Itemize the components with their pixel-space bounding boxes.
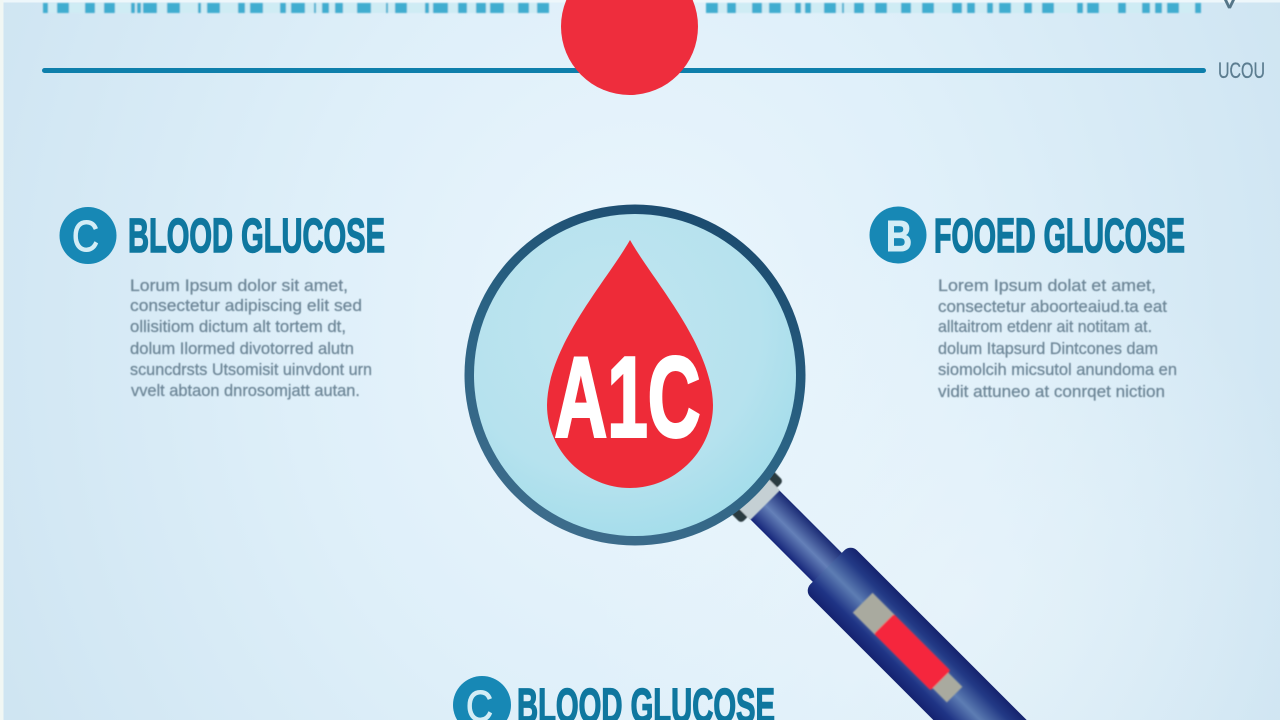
panel: blood glucose left xyxy=(60,207,385,400)
icon: letter B badge: B xyxy=(886,212,912,261)
text block: food glucose: consectetur aboorteaiud.ta eat xyxy=(938,298,1167,316)
handle neck xyxy=(749,489,846,586)
text block: blood glucose: Lorum Ipsum dolor sit amet, xyxy=(130,277,348,295)
icon: magnifying glass lens xyxy=(464,204,806,546)
text block: blood glucose: vvelt abtaon dnrosomjatt autan. xyxy=(131,382,360,400)
icon: blood drop xyxy=(547,240,713,488)
heading: blood glucose: BLOOD GLUCOSE xyxy=(128,210,385,263)
dashed top strip xyxy=(43,3,1201,13)
handle grip xyxy=(804,544,1091,720)
icon: letter B badge xyxy=(870,206,926,264)
text block: food glucose: dolum Itapsurd Dintcones dam xyxy=(938,340,1158,358)
icon: letter C badge xyxy=(453,676,511,720)
text block: food glucose: Lorem Ipsum dolat et amet, xyxy=(938,277,1156,295)
icon: letter C badge: C xyxy=(72,212,99,261)
panel: blood glucose bottom xyxy=(453,676,775,720)
text block: food glucose: vidit attuneo at conrqet niction xyxy=(938,383,1165,401)
gauge on grip xyxy=(853,593,965,705)
A1C label: A1C xyxy=(554,334,700,462)
text block: food glucose: siomolcih micsutol anundoma en xyxy=(938,361,1177,379)
timeline line xyxy=(42,68,1206,73)
text block: blood glucose: dolum Ilormed divotorred alutn xyxy=(130,340,354,358)
icon: letter C badge xyxy=(60,207,116,264)
text block: blood glucose: consectetur adipiscing elit sed xyxy=(130,297,362,315)
text block: blood glucose: ollisitiom dictum alt tortem dt, xyxy=(130,318,346,336)
text block: blood glucose: scuncdrsts Utsomisit uinvdont urn xyxy=(130,361,372,379)
handle collar xyxy=(727,467,786,526)
text block: food glucose: alltaitrom etdenr ait notitam at. xyxy=(938,318,1152,336)
text block: food glucose xyxy=(938,277,1177,401)
red marker circle xyxy=(561,0,698,95)
text block: blood glucose xyxy=(130,277,372,400)
icon: magnifying glass handle xyxy=(725,465,1091,720)
panel: food glucose right xyxy=(870,206,1185,401)
